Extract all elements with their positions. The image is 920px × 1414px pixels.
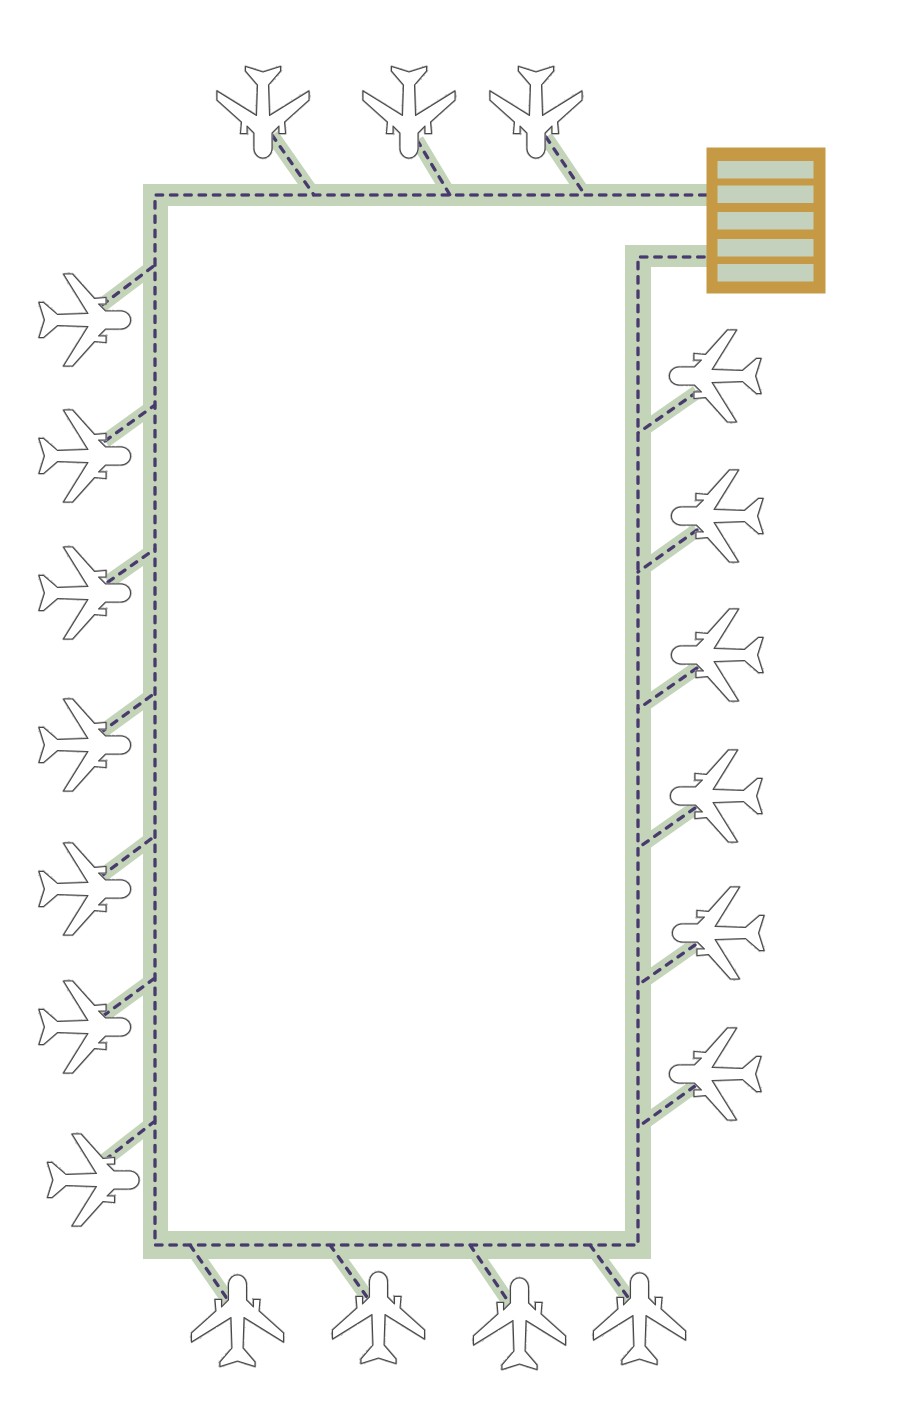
plane top 2 [363,66,455,158]
bottom planes [192,1272,686,1370]
plane right 4 [670,750,762,842]
taxiway network [143,184,710,1259]
plane left 3 [39,547,130,639]
plane bottom 2 [332,1272,424,1364]
plane left 6 [39,981,130,1073]
right planes [670,330,764,1120]
plane left 5 [39,843,130,935]
plane bottom 4 [594,1273,686,1364]
top planes [217,66,582,158]
plane right 1 [670,330,761,422]
plane bottom 3 [474,1278,566,1370]
plane right 6 [670,1028,761,1120]
plane left 1 [39,274,130,366]
plane top 3 [490,66,582,158]
terminal gate bars [718,161,814,282]
plane left 4 [39,699,130,791]
plane top 1 [217,66,309,158]
terminal building [706,148,826,294]
gate connector lanes [100,135,697,1304]
plane right 3 [672,609,763,701]
left planes [39,274,139,1226]
plane left 2 [39,410,130,502]
plane left 7 [48,1134,139,1226]
plane right 5 [672,887,764,979]
dashed taxi route [100,135,706,1304]
plane right 2 [672,470,763,562]
plane bottom 1 [192,1275,284,1366]
